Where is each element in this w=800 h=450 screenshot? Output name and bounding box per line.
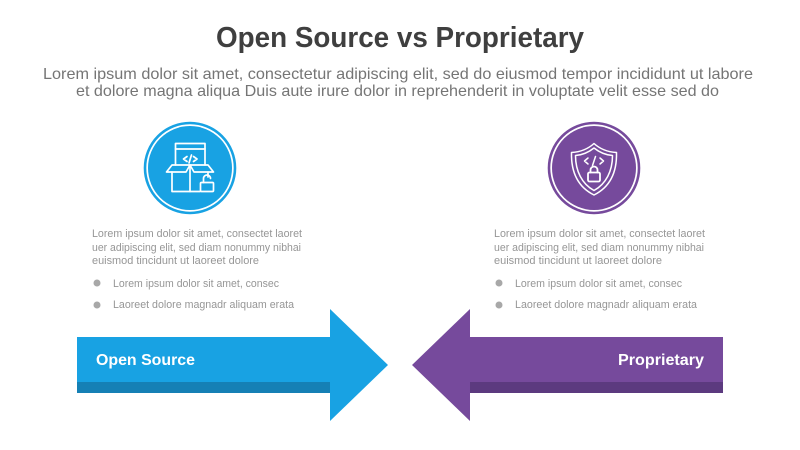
arrow: proprietary [412, 309, 723, 421]
arrow: open source [77, 309, 388, 421]
left description text [92, 228, 302, 267]
icon: open source box [145, 123, 235, 213]
right description text: uer adipiscing elit, sed diam nonummy nibhai [494, 242, 704, 254]
left description text: euismod tincidunt ut laoreet dolore [92, 255, 259, 267]
left bullet list: Lorem ipsum dolor sit amet, consec [113, 278, 279, 290]
right description text: euismod tincidunt ut laoreet dolore [494, 255, 662, 267]
icon: proprietary shield [549, 123, 639, 213]
right bullet list [496, 278, 698, 311]
left bullet list: Laoreet dolore magnadr aliquam erata [113, 299, 295, 311]
right description text: Lorem ipsum dolor sit amet, consectet laoret [494, 228, 705, 240]
arrow: open source: Open Source [96, 352, 195, 369]
right bullet list: Laoreet dolore magnadr aliquam erata [515, 299, 698, 311]
arrow: proprietary: Proprietary [618, 352, 704, 369]
left description text: Lorem ipsum dolor sit amet, consectet laoret [92, 228, 302, 240]
subtitle text: et dolore magna aliqua Duis aute irure dolor in reprehenderit in voluptate velit esse sed do [76, 83, 719, 100]
subtitle text: Lorem ipsum dolor sit amet, consectetur adipiscing elit, sed do eiusmod tempor incididunt ut labore [43, 66, 753, 83]
right bullet list: Lorem ipsum dolor sit amet, consec [515, 278, 682, 290]
right description text [494, 228, 705, 267]
subtitle text [43, 66, 753, 100]
title: Open Source vs Proprietary [216, 22, 584, 54]
left description text: uer adipiscing elit, sed diam nonummy nibhai [92, 242, 301, 254]
left bullet list [94, 278, 295, 311]
